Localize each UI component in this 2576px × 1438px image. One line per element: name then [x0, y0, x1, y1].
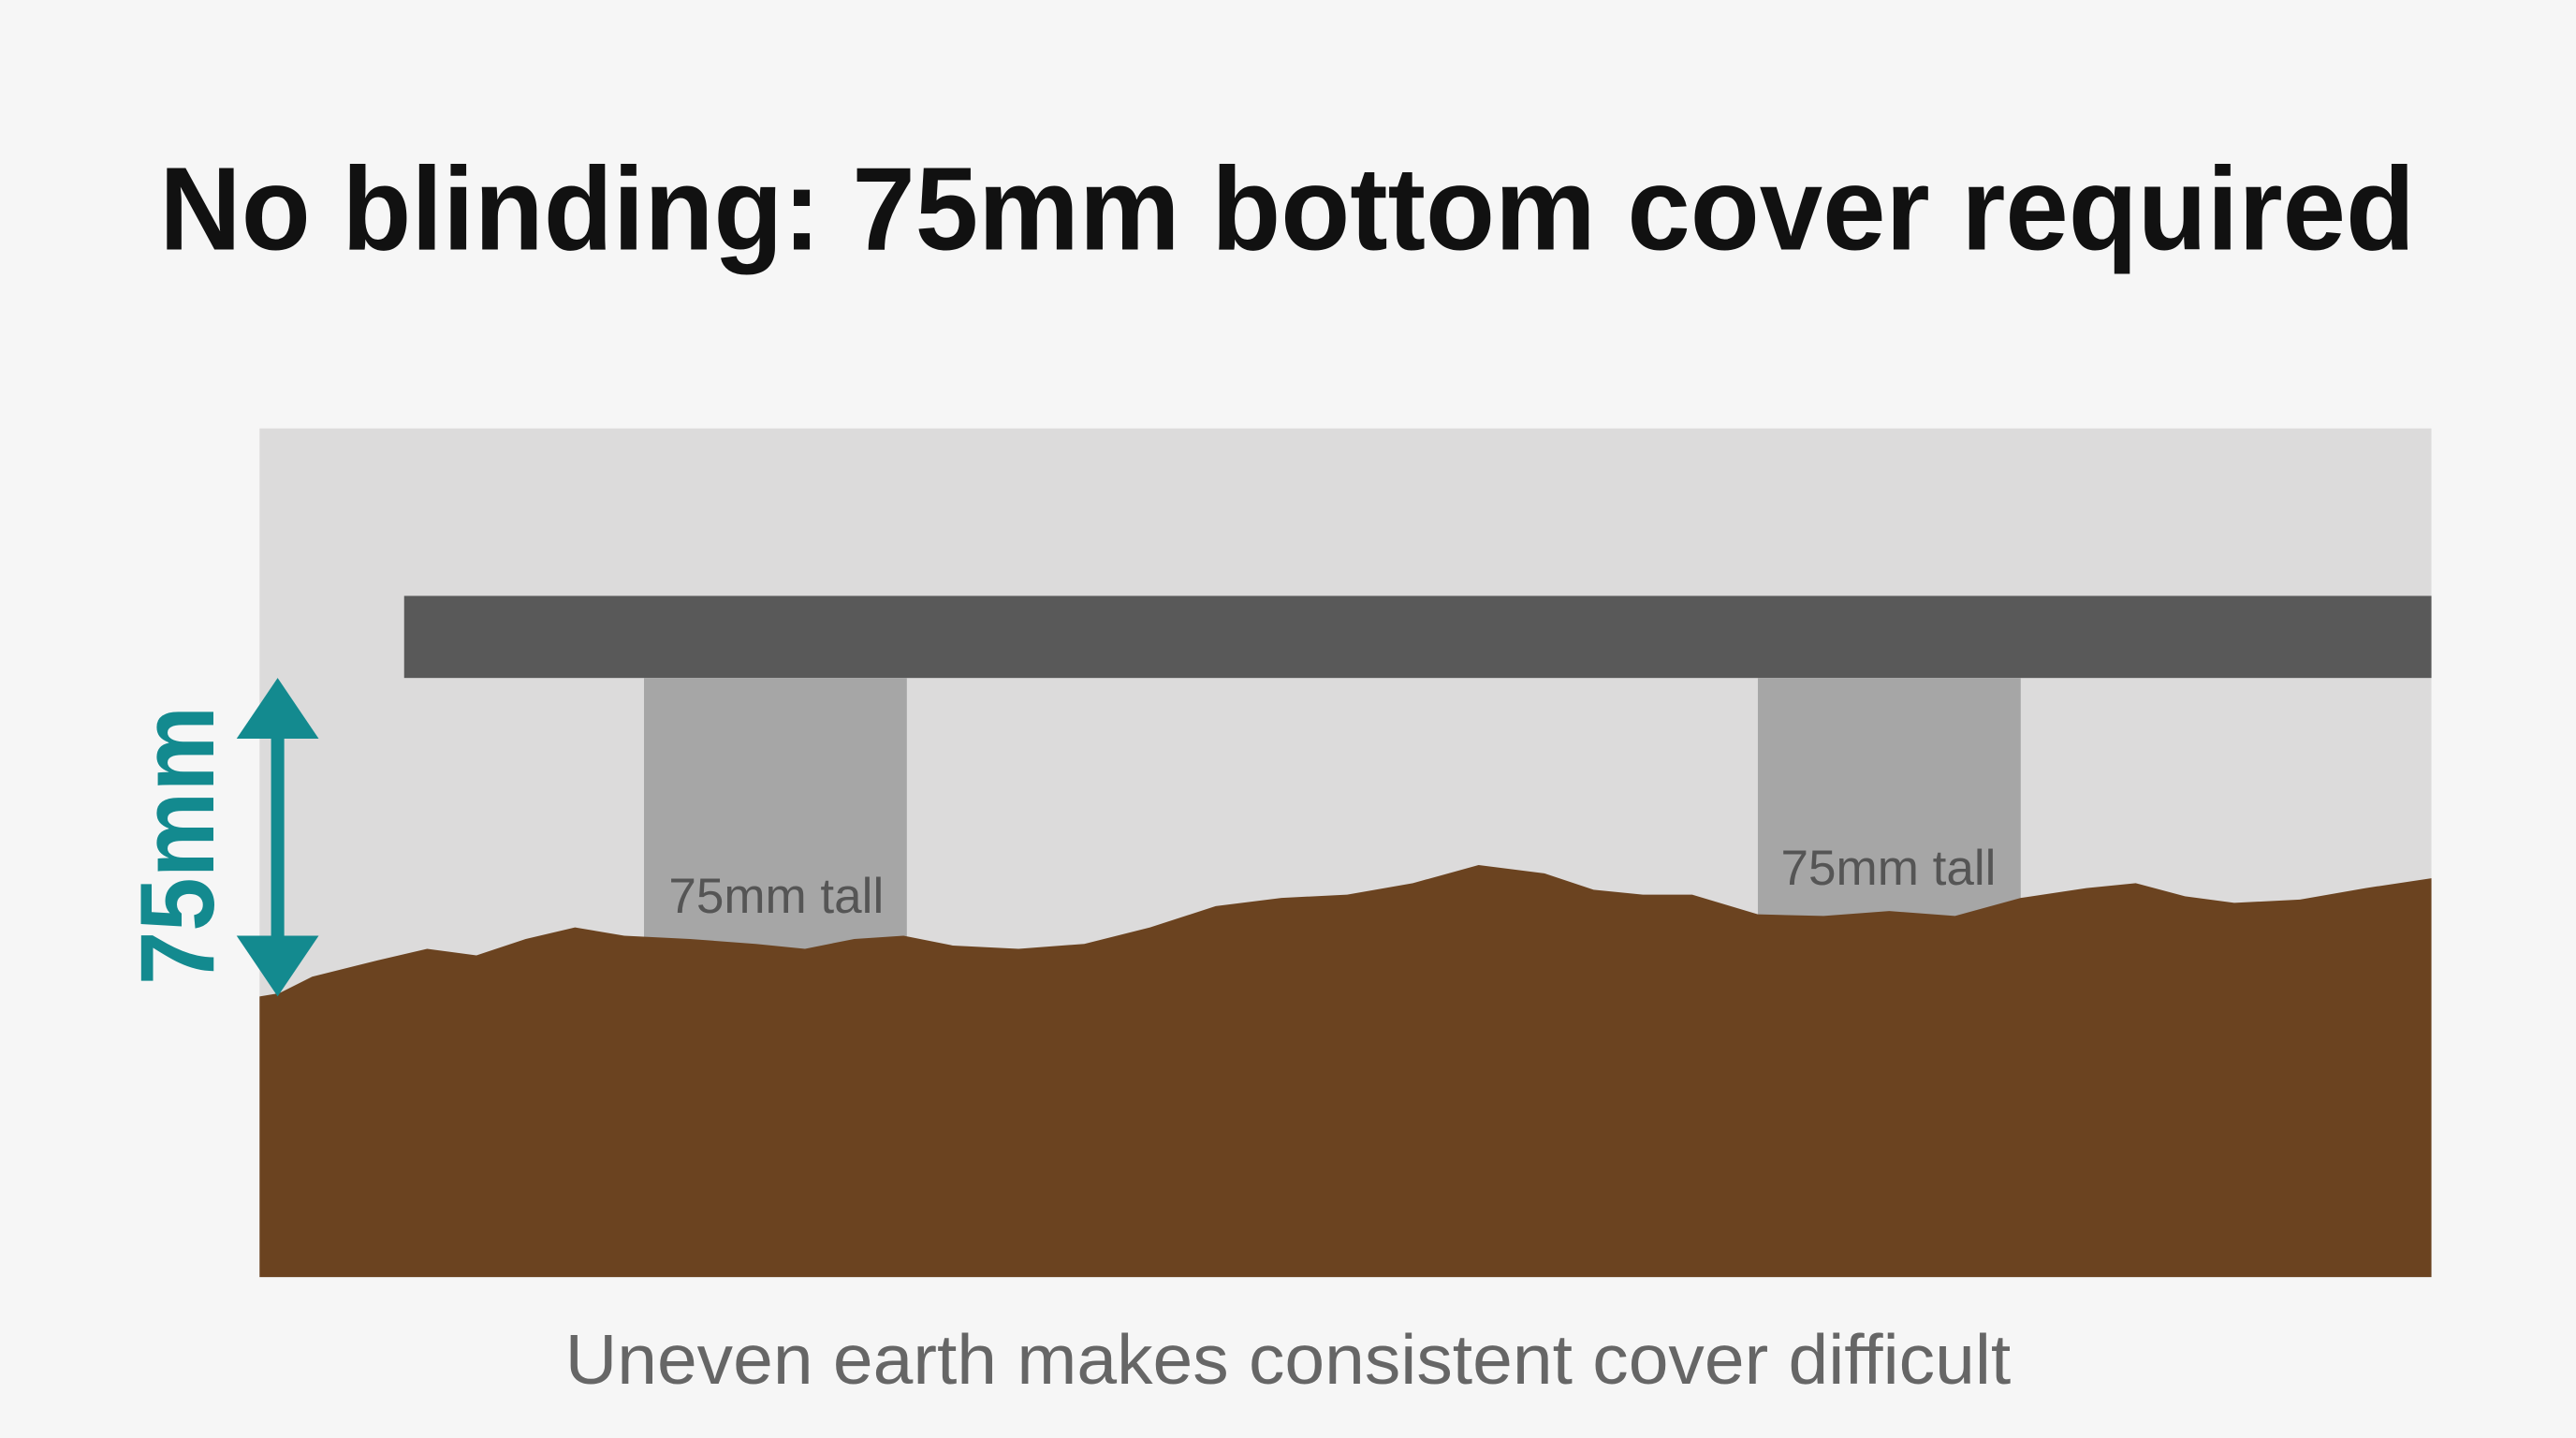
panel: cross-section diagram [259, 429, 2432, 1277]
chair spacer left [644, 678, 907, 957]
caption: Uneven earth makes consistent cover difficult [565, 1320, 2011, 1399]
label: 75mm tall left: 75mm tall [668, 869, 884, 924]
label: 75mm vertical: 75mm [118, 706, 236, 985]
chair spacer right [1758, 678, 2021, 941]
arrow: 75mm dimension [237, 678, 318, 996]
title: No blinding: 75mm bottom cover required [159, 143, 2415, 275]
label: 75mm tall right: 75mm tall [1781, 841, 1996, 896]
reinforcement bar [404, 595, 2432, 678]
uneven earth [259, 865, 2432, 1277]
